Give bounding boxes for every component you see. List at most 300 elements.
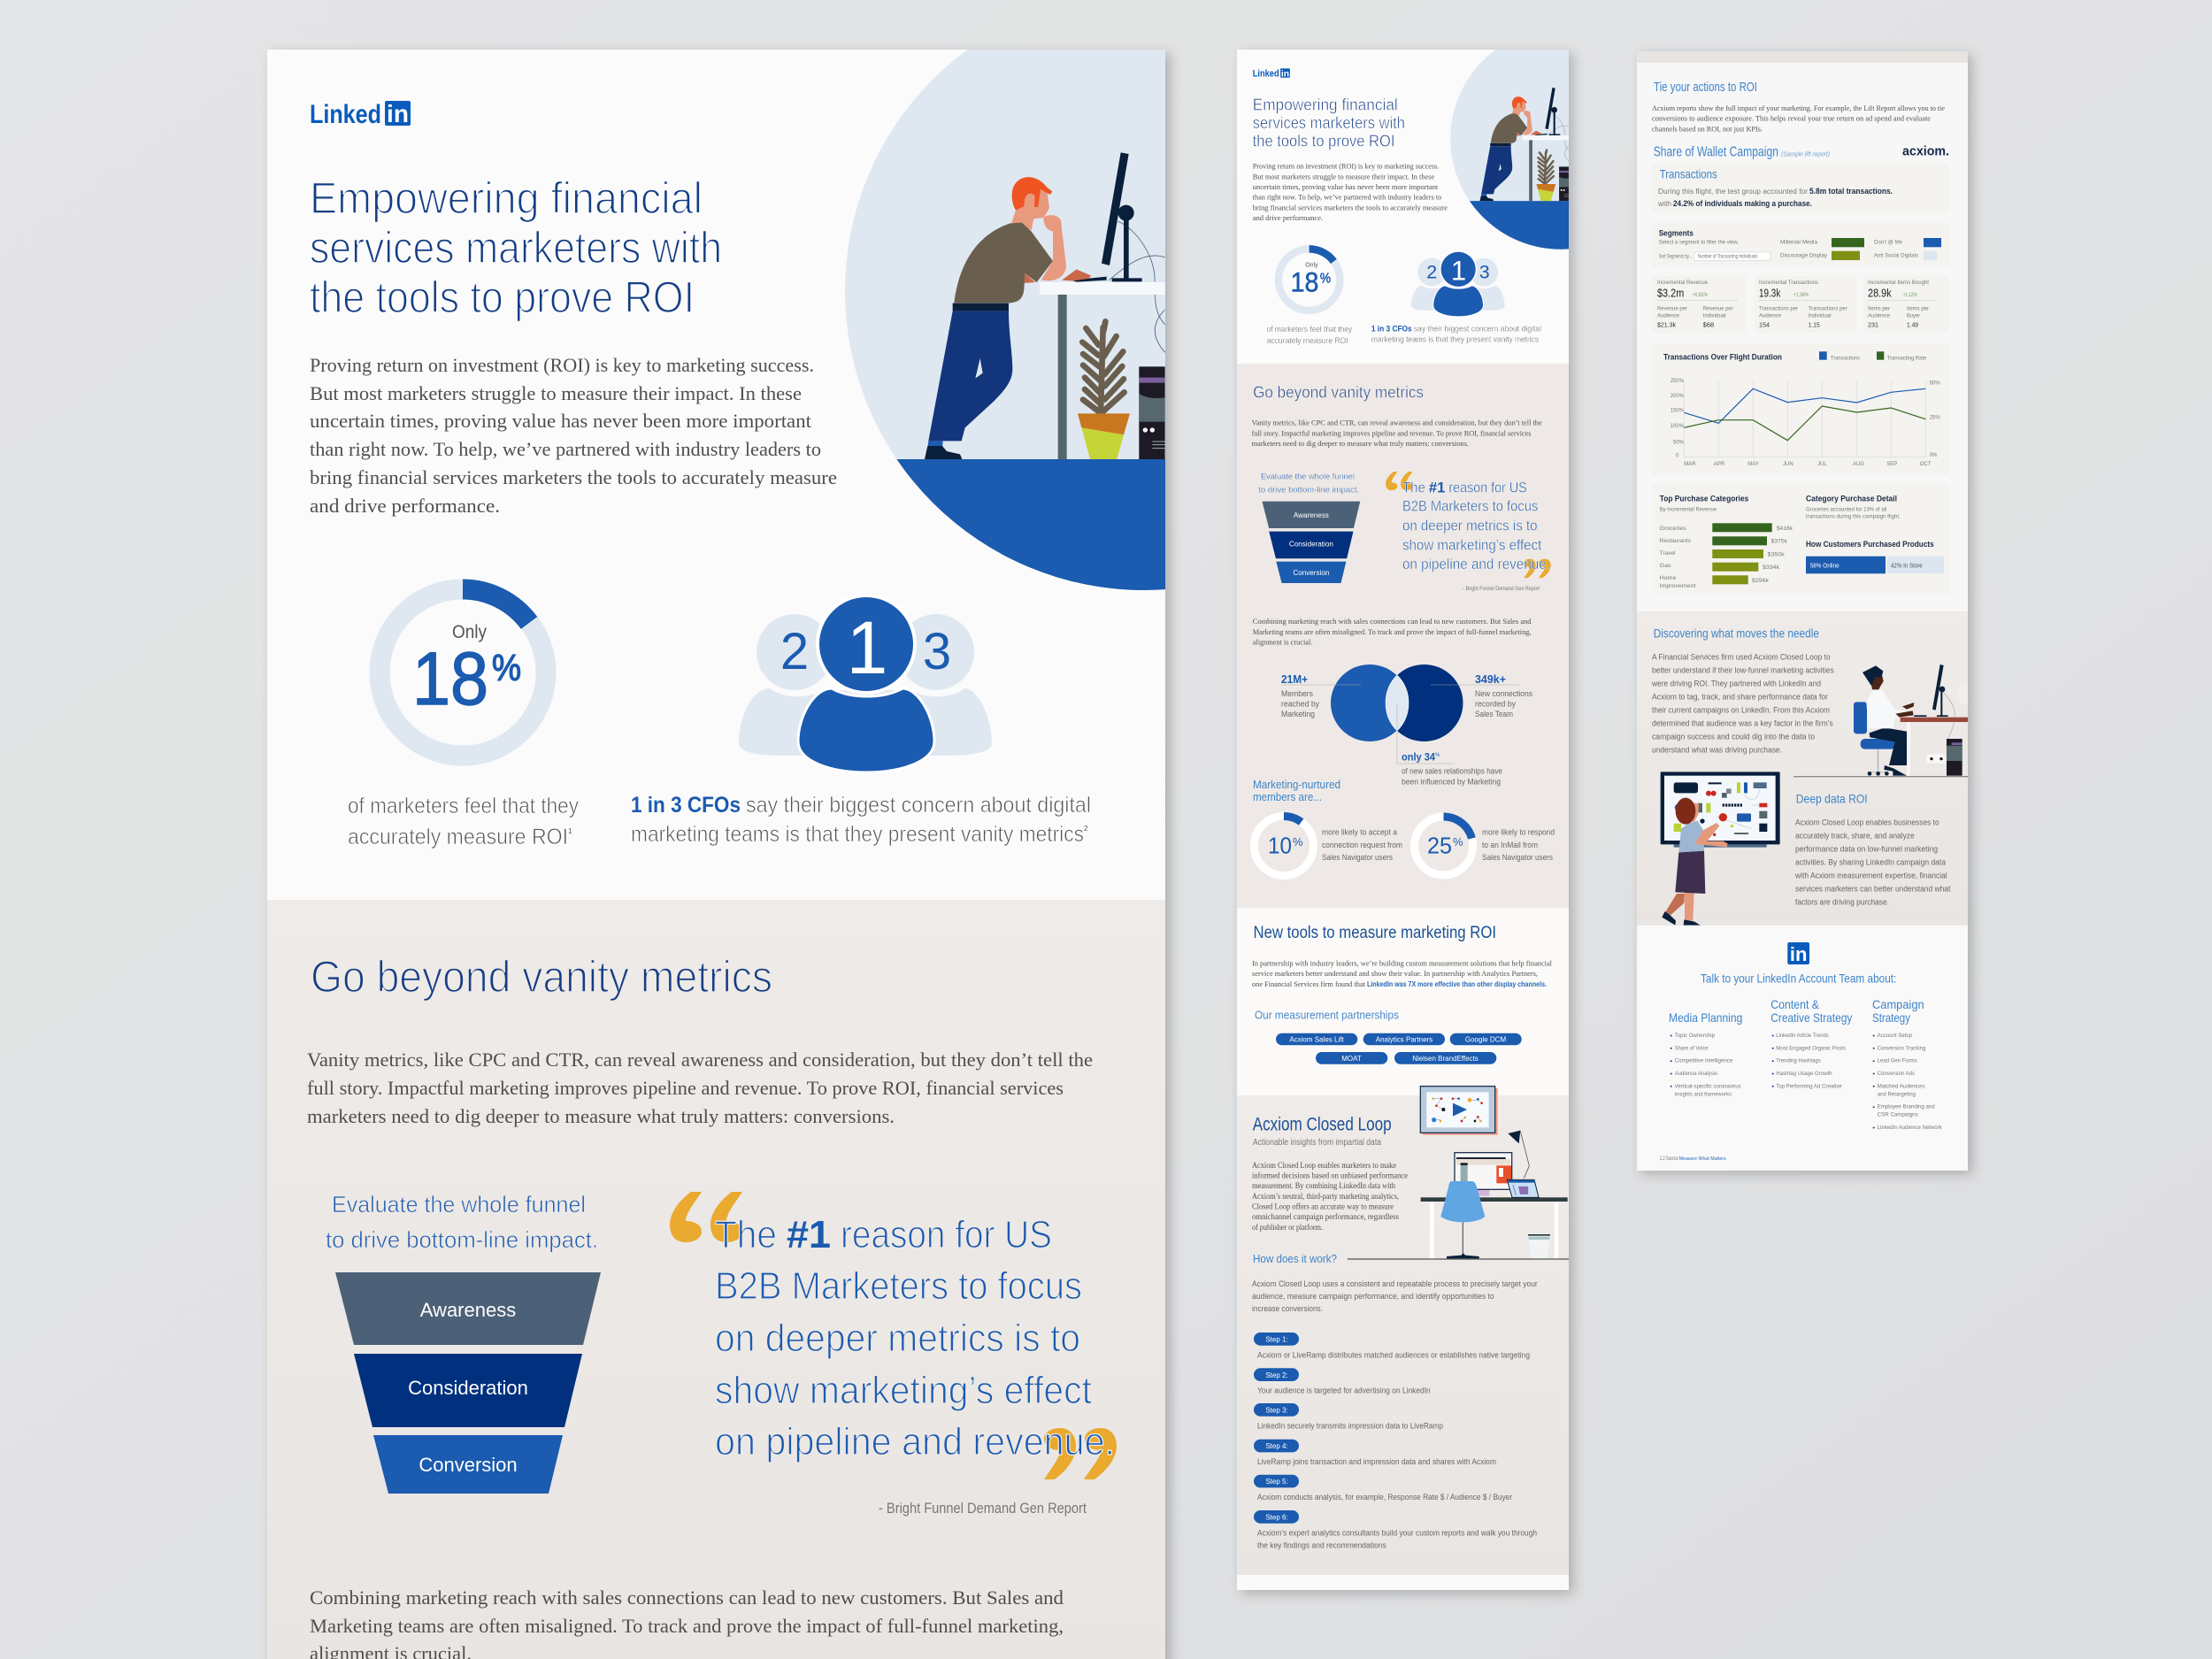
card: purchase categories bar chart: $416k xyxy=(1777,526,1793,532)
mini stat: 1 in 3: 1 xyxy=(1451,255,1466,286)
KPI card: incremental transactions: Transactions per xyxy=(1809,307,1847,312)
scaled header and vanity section xyxy=(1252,28,1671,646)
venn diagram: Members xyxy=(1281,689,1313,698)
paragraph: new tools: service marketers better understand and show their value. In partnership with Analytics Partners, xyxy=(1252,969,1538,978)
acxiom logo: acxiom. xyxy=(1902,144,1949,159)
list: media planning: Vertical-specific coronavirus xyxy=(1675,1084,1741,1089)
list: content and creative strategy: Content & xyxy=(1770,997,1820,1011)
text: 25 percent: more likely to respond xyxy=(1482,828,1555,837)
venn diagram: only 34 xyxy=(1402,750,1435,763)
mini logo: in xyxy=(1281,69,1289,79)
mini intro paragraph: and drive performance. xyxy=(1253,214,1323,222)
list: campaign strategy: Matched Audiences xyxy=(1878,1084,1925,1089)
paragraph: discovering: Acxiom to tag, track, and share performance data for xyxy=(1652,693,1828,702)
heading: acxiom closed loop: Actionable insights from impartial data xyxy=(1253,1138,1381,1148)
card: segments: Sort Segments by... xyxy=(1659,255,1692,260)
title xyxy=(310,173,722,322)
mini quote: on pipeline and revenue. xyxy=(1402,557,1550,572)
mini quote: B2B Marketers to focus xyxy=(1402,499,1538,515)
text: category purchase detail: Groceries accounted for 13% of all xyxy=(1806,507,1886,512)
paragraph: deep data ROI: accurately track, share, and analyze xyxy=(1795,831,1915,840)
list: campaign strategy: Account Setup xyxy=(1878,1033,1913,1039)
KPI card: incremental transactions: 154 xyxy=(1759,322,1770,328)
paragraph: deep data ROI: factors are driving purchase. xyxy=(1795,897,1889,906)
mini captions: say their biggest concern about digital xyxy=(1414,325,1541,334)
paragraph: deep data ROI: Acxiom Closed Loop enables businesses to xyxy=(1795,818,1939,826)
line chart: transactions over flight duration: 50% xyxy=(1673,440,1685,445)
mini title: Empowering financial xyxy=(1253,95,1398,113)
partnership pills: Nielsen BrandEffects xyxy=(1412,1055,1479,1063)
process steps list: Step 4: xyxy=(1265,1442,1288,1450)
process steps list: Step 2: xyxy=(1265,1371,1288,1379)
mini captions: 1 in 3 CFOs xyxy=(1371,325,1412,334)
line chart: transactions over flight duration: 200% xyxy=(1671,394,1685,399)
mini title: services marketers with xyxy=(1253,113,1405,132)
list: campaign strategy: Lead Gen Forms xyxy=(1878,1059,1917,1064)
paragraph: deep data ROI: services marketers can better understand what xyxy=(1795,884,1951,893)
card: purchase categories bar chart: Gas xyxy=(1660,564,1671,569)
paragraph: tie your actions: channels based on ROI, not just KPIs. xyxy=(1652,124,1763,133)
pull quote: on deeper metrics is to xyxy=(715,1317,1080,1360)
caption: 1 in 3 CFOs: 1 in 3 CFOs xyxy=(631,793,741,818)
venn diagram: Marketing xyxy=(1281,710,1315,718)
text: 10 percent: more likely to accept a xyxy=(1322,828,1397,837)
venn diagram xyxy=(1281,664,1532,786)
venn diagram: reached by xyxy=(1281,699,1319,708)
mini quote: - Bright Funnel Demand Gen Report xyxy=(1463,586,1540,592)
card: segments: Segments xyxy=(1659,229,1694,238)
card: purchase categories bar chart xyxy=(1653,484,1950,595)
KPI card: incremental revenue: +0.81% xyxy=(1693,293,1709,298)
source footnote xyxy=(1660,1156,1726,1162)
heading: how does it work: How does it work? xyxy=(1253,1252,1337,1265)
stat: 25 percent donut: % xyxy=(1453,835,1463,849)
line chart: transactions over flight duration: 250% xyxy=(1671,379,1685,384)
stat: 10 percent donut: % xyxy=(1293,835,1303,849)
heading: marketing-nurtured members: Marketing-nurtured xyxy=(1253,778,1340,791)
mini intro paragraph: But most marketers struggle to measure their impact. In these xyxy=(1253,173,1435,180)
KPI card: incremental revenue: Incremental Revenue xyxy=(1657,280,1709,286)
text: 10 percent: connection request from xyxy=(1322,841,1402,849)
KPI card: incremental items bought: Items per xyxy=(1907,307,1929,312)
line chart: transactions over flight duration: SEP xyxy=(1886,462,1897,467)
mini vanity paragraph: Vanity metrics, like CPC and CTR, can reveal awareness and consideration, but they don’t tell the xyxy=(1252,419,1542,427)
heading: tie your actions: Tie your actions to ROI xyxy=(1654,80,1757,95)
card: transactions summary: 5.8m total transactions. xyxy=(1809,187,1893,196)
KPI card: incremental transactions: Individual xyxy=(1809,313,1832,319)
process steps list: LiveRamp joins transaction and impression data and shares with Acxiom xyxy=(1257,1457,1496,1466)
list: campaign strategy: Strategy xyxy=(1872,1010,1910,1025)
line chart: transactions over flight duration: JUL xyxy=(1817,462,1827,467)
line chart: transactions over flight duration: APR xyxy=(1714,462,1725,467)
funnel chart: Consideration xyxy=(408,1377,528,1399)
stacked bar: how customers purchased products: 42% In Store xyxy=(1891,563,1923,569)
card: transactions summary: with xyxy=(1657,199,1671,208)
paragraph: discovering: campaign success and could dig into the data to xyxy=(1652,733,1815,741)
mini intro paragraph: than right now. To help, we’ve partnered with industry leaders to xyxy=(1253,194,1441,202)
mini intro paragraph: Proving return on investment (ROI) is key to marketing success. xyxy=(1253,162,1439,170)
KPI card: incremental revenue: Audience xyxy=(1657,313,1680,319)
stat: 18 percent donut: % xyxy=(492,647,521,688)
mini quote: show marketing’s effect xyxy=(1402,537,1542,553)
list: campaign strategy: and Retargeting xyxy=(1878,1092,1916,1097)
list: content and creative strategy xyxy=(1770,997,1852,1089)
card: segments: Discourage Display xyxy=(1780,254,1827,259)
funnel chart xyxy=(335,1272,601,1494)
mini stat: 1 in 3: 2 xyxy=(1426,262,1437,283)
partnership pills: Acxiom Sales Lift xyxy=(1289,1035,1344,1044)
mini quote xyxy=(1386,472,1551,592)
line chart: transactions over flight duration: Transactions Over Flight Duration xyxy=(1663,353,1782,362)
heading: new tools: New tools to measure marketing ROI xyxy=(1253,924,1496,942)
mini stat: 18 percent: % xyxy=(1320,271,1331,286)
intro paragraph: uncertain times, proving value has never been more important xyxy=(310,410,811,432)
illustration: office desk with framed screen xyxy=(1348,1087,1569,1260)
caption: 1 in 3 CFOs xyxy=(631,793,1091,847)
card: purchase categories bar chart: Travel xyxy=(1660,551,1675,557)
paragraph: combining marketing reach xyxy=(310,1586,1064,1659)
paragraph: deep data ROI: with Acxiom measurement expertise, financial xyxy=(1794,871,1947,879)
paragraph: acxiom closed loop: Closed Loop offers an accurate way to measure xyxy=(1252,1202,1394,1211)
paragraph: how does it work xyxy=(1252,1279,1538,1313)
LinkedIn logo: Linked xyxy=(310,100,381,129)
process steps list: Step 6: xyxy=(1265,1513,1288,1522)
caption: 18 percent: accurately measure ROI xyxy=(348,825,568,849)
paragraph: combining marketing reach: Marketing teams are often misaligned. To track and prove the impact of full-funnel marketing, xyxy=(310,1615,1064,1637)
paragraph: how does it work: increase conversions. xyxy=(1252,1304,1323,1313)
text: category purchase detail: transactions during this campaign flight. xyxy=(1806,514,1901,519)
mini intro paragraph: bring financial services marketers the tools to accurately measure xyxy=(1253,204,1448,211)
card: transactions summary: Transactions xyxy=(1660,167,1717,181)
line chart: transactions over flight duration: OCT xyxy=(1920,462,1932,467)
paragraph: acxiom closed loop: measurement. By combining LinkedIn data with xyxy=(1252,1181,1395,1190)
card: segments: Select a segment to filter the view. xyxy=(1659,241,1739,246)
KPI card: incremental items bought: 231 xyxy=(1868,322,1878,328)
mini funnel: Awareness xyxy=(1294,511,1329,519)
card: purchase categories bar chart: Home xyxy=(1660,576,1677,581)
mini funnel heading: Evaluate the whole funnel xyxy=(1261,472,1355,482)
list: campaign strategy: LinkedIn Audience Network xyxy=(1878,1125,1943,1131)
list: campaign strategy: Conversion Ads xyxy=(1878,1071,1915,1077)
KPI card: incremental items bought: +1.12% xyxy=(1903,293,1917,298)
stat: 25 percent donut: 25 xyxy=(1427,832,1452,858)
mini stat: 18 percent xyxy=(1279,249,1340,311)
stat: 1 in 3 people icon: 2 xyxy=(780,623,809,680)
mini captions xyxy=(1267,325,1541,345)
paragraph: discovering: their current campaigns on LinkedIn. From this Acxiom xyxy=(1652,706,1830,715)
paragraph: acxiom closed loop: Acxiom’s neutral, third-party marketing analytics, xyxy=(1252,1192,1399,1201)
mini quote: #1 xyxy=(1429,480,1445,495)
paragraph: new tools: one Financial Services firm found that xyxy=(1252,979,1366,988)
paragraph: discovering: understand what was driving purchase. xyxy=(1652,746,1782,755)
process steps list: LinkedIn securely transmits impression data to LiveRamp xyxy=(1257,1422,1443,1431)
KPI card: incremental items bought: Incremental Items Bought xyxy=(1868,280,1929,286)
heading: marketing-nurtured members: members are... xyxy=(1253,790,1322,803)
text: category purchase detail xyxy=(1806,495,1901,519)
partnership pills xyxy=(1276,1033,1522,1064)
mini funnel heading: to drive bottom-line impact. xyxy=(1258,485,1359,495)
card: segments xyxy=(1652,223,1949,267)
stat: 10 percent donut: 10 xyxy=(1268,832,1292,858)
mini stat: 1 in 3: 3 xyxy=(1479,262,1490,283)
mini quote: on deeper metrics is to xyxy=(1402,518,1538,534)
process steps list: Step 1: xyxy=(1265,1336,1288,1343)
paragraph: discovering: were driving ROI. They partnered with LinkedIn and xyxy=(1651,680,1821,688)
mini logo: Linked xyxy=(1253,69,1279,80)
stat: 1 in 3 people icon: 3 xyxy=(923,623,951,680)
card: purchase categories bar chart: $296k xyxy=(1752,579,1770,584)
paragraph: discovering: better understand if their low-funnel marketing activities xyxy=(1652,666,1834,675)
line chart: transactions over flight duration: 25% xyxy=(1930,415,1940,420)
line chart: transactions over flight duration xyxy=(1652,343,1949,475)
card: purchase categories bar chart: By Incremental Revenue xyxy=(1660,507,1717,512)
pull quote: show marketing’s effect xyxy=(715,1369,1092,1412)
process steps list: Your audience is targeted for advertising on LinkedIn xyxy=(1257,1386,1431,1394)
process steps list: Step 3: xyxy=(1265,1407,1288,1414)
paragraph: vanity metrics: full story. Impactful marketing improves pipeline and revenue. To prove ROI, financial services xyxy=(307,1077,1064,1099)
intro paragraph: and drive performance. xyxy=(310,495,500,517)
process steps list: the key findings and recommendations xyxy=(1257,1540,1386,1549)
process steps list: Acxiom’s expert analytics consultants build your custom reports and walk you through xyxy=(1257,1528,1537,1537)
partnership pills: Google DCM xyxy=(1465,1035,1506,1044)
heading: deep data ROI: Deep data ROI xyxy=(1796,792,1868,806)
KPI card: incremental transactions: Audience xyxy=(1759,313,1782,319)
process steps list: Acxiom conducts analysis, for example, Response Rate $ / Audience $ / Buyer xyxy=(1257,1493,1512,1502)
line chart: transactions over flight duration: AUG xyxy=(1853,462,1864,467)
list: campaign strategy: Campaign xyxy=(1872,997,1924,1011)
heading: acxiom closed loop xyxy=(1253,1115,1392,1148)
text: 25 percent xyxy=(1482,828,1555,862)
process steps list: Acxiom or LiveRamp distributes matched audiences or establishes native targeting xyxy=(1257,1350,1530,1359)
line chart: transactions over flight duration: JUN xyxy=(1783,462,1793,467)
paragraph: acxiom closed loop: informed decisions based on unbiased performance xyxy=(1252,1171,1408,1180)
mini title xyxy=(1253,95,1405,150)
intro paragraph: than right now. To help, we’ve partnered with industry leaders to xyxy=(310,438,821,460)
mini vanity paragraph: full story. Impactful marketing improves pipeline and revenue. To prove ROI, financial services xyxy=(1252,429,1532,437)
KPI card: incremental revenue: $68 xyxy=(1703,322,1714,328)
card: segments: Anti Social Digitals xyxy=(1874,254,1918,259)
card: purchase categories bar chart: $375k xyxy=(1771,539,1788,544)
mini quote: reason for US xyxy=(1448,480,1527,495)
mini intro paragraph: uncertain times, proving value has never been more important xyxy=(1253,183,1439,191)
paragraph: deep data ROI xyxy=(1794,818,1951,906)
mini intro paragraph xyxy=(1253,162,1448,222)
list: media planning: insights and frameworks xyxy=(1675,1092,1732,1097)
paragraph: new tools: LinkedIn was 7X more effective than other display channels. xyxy=(1367,980,1547,988)
pull quote: B2B Marketers to focus xyxy=(715,1264,1082,1308)
KPI card: incremental transactions: 19.3k xyxy=(1759,287,1781,300)
mini vanity paragraph xyxy=(1252,419,1542,448)
funnel chart: Conversion xyxy=(419,1454,518,1476)
title: services marketers with xyxy=(310,223,722,273)
funnel heading: to drive bottom-line impact. xyxy=(326,1226,598,1253)
process steps list: Step 5: xyxy=(1265,1478,1288,1486)
illustration: woman at data board xyxy=(1661,772,1780,926)
paragraph: tie your actions: Acxiom reports show the full impact of your marketing. For example, the Lift Report allows you to tie xyxy=(1652,104,1945,112)
text: 10 percent xyxy=(1322,828,1402,862)
venn diagram: 21M+ xyxy=(1281,672,1308,686)
mini funnel: Consideration xyxy=(1289,541,1333,549)
paragraph: discovering: determined that audience was a key factor in the firm’s xyxy=(1652,719,1833,728)
caption: 18 percent: of marketers feel that they xyxy=(348,794,579,818)
intro paragraph: Proving return on investment (ROI) is key to marketing success. xyxy=(310,354,814,376)
source footnote: 1,2 Source: xyxy=(1660,1156,1679,1162)
KPI card: incremental items bought: 1.49 xyxy=(1907,322,1918,328)
list: media planning: Topic Ownership xyxy=(1675,1033,1716,1039)
title: Empowering financial xyxy=(310,173,703,223)
list: content and creative strategy: Trending Hashtags xyxy=(1776,1059,1821,1064)
list: content and creative strategy: Creative Strategy xyxy=(1770,1010,1852,1025)
stacked bar: how customers purchased products: How Customers Purchased Products xyxy=(1806,540,1934,549)
paragraph: vanity metrics: marketers need to dig deeper to measure what truly matters: conversions. xyxy=(307,1105,895,1127)
heading: share of wallet campaign: Share of Wallet Campaign xyxy=(1654,145,1778,160)
mini heading: Go beyond vanity metrics xyxy=(1253,383,1424,402)
card: segments: Number of Transacting Individuals xyxy=(1698,255,1758,260)
card: purchase categories bar chart: Top Purchase Categories xyxy=(1660,495,1748,503)
list: content and creative strategy: Hashtag Usage Growth xyxy=(1776,1071,1832,1077)
venn diagram: been influenced by Marketing xyxy=(1402,777,1501,786)
icon: LinkedIn logo: in xyxy=(1790,943,1807,965)
line chart: transactions over flight duration: Transacting Rate xyxy=(1887,356,1927,361)
card: purchase categories bar chart: Groceries xyxy=(1660,526,1686,532)
mini combining paragraph: Combining marketing reach with sales connections can lead to new customers. But Sales and xyxy=(1253,618,1532,626)
paragraph: acxiom closed loop xyxy=(1252,1161,1408,1232)
heading: talk to your account team: Talk to your LinkedIn Account Team about: xyxy=(1701,972,1896,986)
list: content and creative strategy: LinkedIn Article Trends xyxy=(1776,1033,1829,1039)
panel: right full infographic xyxy=(1637,51,1972,1174)
KPI card: incremental revenue: Revenue per xyxy=(1657,307,1687,312)
list: media planning: Media Planning xyxy=(1669,1010,1742,1025)
line chart: transactions over flight duration: 50% xyxy=(1930,380,1940,386)
mini captions: accurately measure ROI xyxy=(1267,336,1348,345)
paragraph: discovering xyxy=(1651,653,1834,755)
KPI card: incremental revenue: Revenue per xyxy=(1703,307,1733,312)
mini captions: marketing teams is that they present vanity metrics xyxy=(1371,335,1539,344)
mini combining paragraph: Marketing teams are often misaligned. To track and prove the impact of full-funnel marketing, xyxy=(1253,628,1532,636)
text: 25 percent: to an InMail from xyxy=(1482,841,1538,849)
pull quote: on pipeline and revenue. xyxy=(715,1420,1115,1463)
mini stat: 1 in 3 xyxy=(1411,250,1505,317)
stat: 10 percent donut xyxy=(1255,816,1313,876)
pull quote xyxy=(670,1192,1117,1479)
list: campaign strategy xyxy=(1872,997,1943,1131)
text: 10 percent: Sales Navigator users xyxy=(1322,853,1393,862)
panel: large poster detail xyxy=(266,47,1177,1659)
KPI card: incremental transactions: +1.38% xyxy=(1793,293,1809,298)
heading: discovering what moves the needle: Discovering what moves the needle xyxy=(1654,627,1819,641)
KPI card: incremental items bought xyxy=(1863,276,1949,333)
card: transactions summary: During this flight, the test group accounted for xyxy=(1658,187,1808,196)
mini hero illustration xyxy=(1450,28,1671,250)
paragraph: new tools: In partnership with industry leaders, we’re building custom measurement solutions that help financial xyxy=(1252,959,1553,968)
LinkedIn logo: in xyxy=(387,100,409,127)
card: segments: Millenial Media xyxy=(1780,241,1818,246)
stat: 1 in 3 people icon xyxy=(739,594,992,772)
funnel chart: Awareness xyxy=(420,1299,516,1321)
mini vanity paragraph: marketers need to dig deeper to measure what truly matters: conversions. xyxy=(1252,440,1469,448)
list: campaign strategy: Conversion Tracking xyxy=(1878,1046,1925,1051)
process steps list xyxy=(1254,1333,1537,1549)
paragraph: new tools xyxy=(1252,959,1553,988)
line chart: transactions over flight duration: 0 xyxy=(1676,453,1679,458)
text: category purchase detail: Category Purchase Detail xyxy=(1806,495,1897,503)
list: media planning: Audience Analysis xyxy=(1675,1071,1717,1077)
heading: acxiom closed loop: Acxiom Closed Loop xyxy=(1253,1115,1392,1135)
paragraph: how does it work: audience, measure campaign performance, and identify opportunities to xyxy=(1252,1292,1494,1301)
paragraph: how does it work: Acxiom Closed Loop uses a consistent and repeatable process to precisely target your xyxy=(1252,1279,1538,1288)
mini funnel: Conversion xyxy=(1293,569,1329,577)
caption: 1 in 3 CFOs: say their biggest concern about digital xyxy=(746,793,1091,818)
venn diagram: 349k+ xyxy=(1475,672,1506,686)
funnel heading: Evaluate the whole funnel xyxy=(332,1191,586,1217)
paragraph: acxiom closed loop: of publisher or platform. xyxy=(1252,1223,1323,1232)
card: purchase categories bar chart: $334k xyxy=(1763,565,1780,571)
card: transactions summary: 24.2% of individuals making a purchase. xyxy=(1673,199,1812,208)
intro paragraph: But most marketers struggle to measure their impact. In these xyxy=(310,382,802,404)
card: transactions summary xyxy=(1652,164,1949,213)
illustration: man at computer xyxy=(1793,664,1968,777)
KPI card: incremental revenue: Individual xyxy=(1703,313,1726,319)
line chart: transactions over flight duration: MAY xyxy=(1747,462,1759,467)
KPI card: incremental items bought: 28.9k xyxy=(1868,287,1892,300)
paragraph: tie your actions xyxy=(1652,104,1945,133)
stat: 1 in 3 people icon: 1 xyxy=(847,606,887,689)
paragraph: discovering: A Financial Services firm used Acxiom Closed Loop to xyxy=(1652,653,1831,662)
KPI card: incremental transactions: Transactions per xyxy=(1759,307,1798,312)
list: media planning: Share of Voice xyxy=(1675,1046,1709,1051)
pull quote: reason for US xyxy=(841,1213,1052,1256)
mini title: the tools to prove ROI xyxy=(1253,132,1394,150)
list: content and creative strategy: Top Performing Ad Creative xyxy=(1776,1084,1842,1089)
pull quote: The xyxy=(715,1213,777,1256)
paragraph: vanity metrics: Vanity metrics, like CPC and CTR, can reveal awareness and consideration, but they don’t tell the xyxy=(307,1048,1093,1071)
KPI card: incremental items bought: Buyer xyxy=(1907,313,1920,319)
KPI card: incremental items bought: Items per xyxy=(1868,307,1890,312)
stat: 18 percent donut: 18 xyxy=(412,637,488,720)
list: media planning xyxy=(1669,1010,1742,1097)
line chart: transactions over flight duration: MAR xyxy=(1684,462,1696,467)
heading: our measurement partnerships: Our measurement partnerships xyxy=(1255,1009,1399,1022)
paragraph: acxiom closed loop: Acxiom Closed Loop enables marketers to make xyxy=(1252,1161,1396,1170)
venn diagram: recorded by xyxy=(1475,699,1516,708)
mini stat: 18 percent: Only xyxy=(1305,261,1318,269)
paragraph: combining marketing reach: Combining marketing reach with sales connections can lead to new customers. But Sales and xyxy=(310,1586,1064,1609)
funnel heading xyxy=(326,1191,598,1253)
stacked bar: how customers purchased products: 58% Online xyxy=(1810,563,1839,569)
venn diagram: of new sales relationships have xyxy=(1402,766,1502,775)
KPI card: incremental transactions: Incremental Transactions xyxy=(1759,280,1818,286)
mini combining paragraph: alignment is crucial. xyxy=(1253,638,1312,646)
source footnote: Measure What Matters xyxy=(1679,1156,1726,1162)
text: 25 percent: Sales Navigator users xyxy=(1482,853,1553,862)
paragraph: tie your actions: conversions to audience exposure. This helps reveal your true return on ad spend and evaluate xyxy=(1652,114,1931,123)
list: campaign strategy: Employee Branding and xyxy=(1878,1105,1935,1110)
paragraph: deep data ROI: performance data on low-funnel marketing xyxy=(1795,844,1938,853)
paragraph: vanity metrics xyxy=(307,1048,1093,1127)
mini funnel xyxy=(1262,502,1360,583)
mini combining paragraph xyxy=(1253,618,1532,646)
pull quote: #1 xyxy=(787,1213,831,1256)
paragraph: acxiom closed loop: omnichannel campaign performance, regardless xyxy=(1252,1212,1399,1221)
intro paragraph: bring financial services marketers the tools to accurately measure xyxy=(310,466,837,488)
mini stat: 18 percent: 18 xyxy=(1291,266,1318,297)
mini quote: The xyxy=(1402,480,1425,495)
partnership pills: MOAT xyxy=(1341,1055,1362,1063)
line chart: transactions over flight duration: Transactions xyxy=(1831,356,1860,361)
KPI card: incremental items bought: Audience xyxy=(1868,313,1891,319)
stacked bar: how customers purchased products xyxy=(1806,540,1944,573)
heading: marketing-nurtured members xyxy=(1253,778,1340,803)
